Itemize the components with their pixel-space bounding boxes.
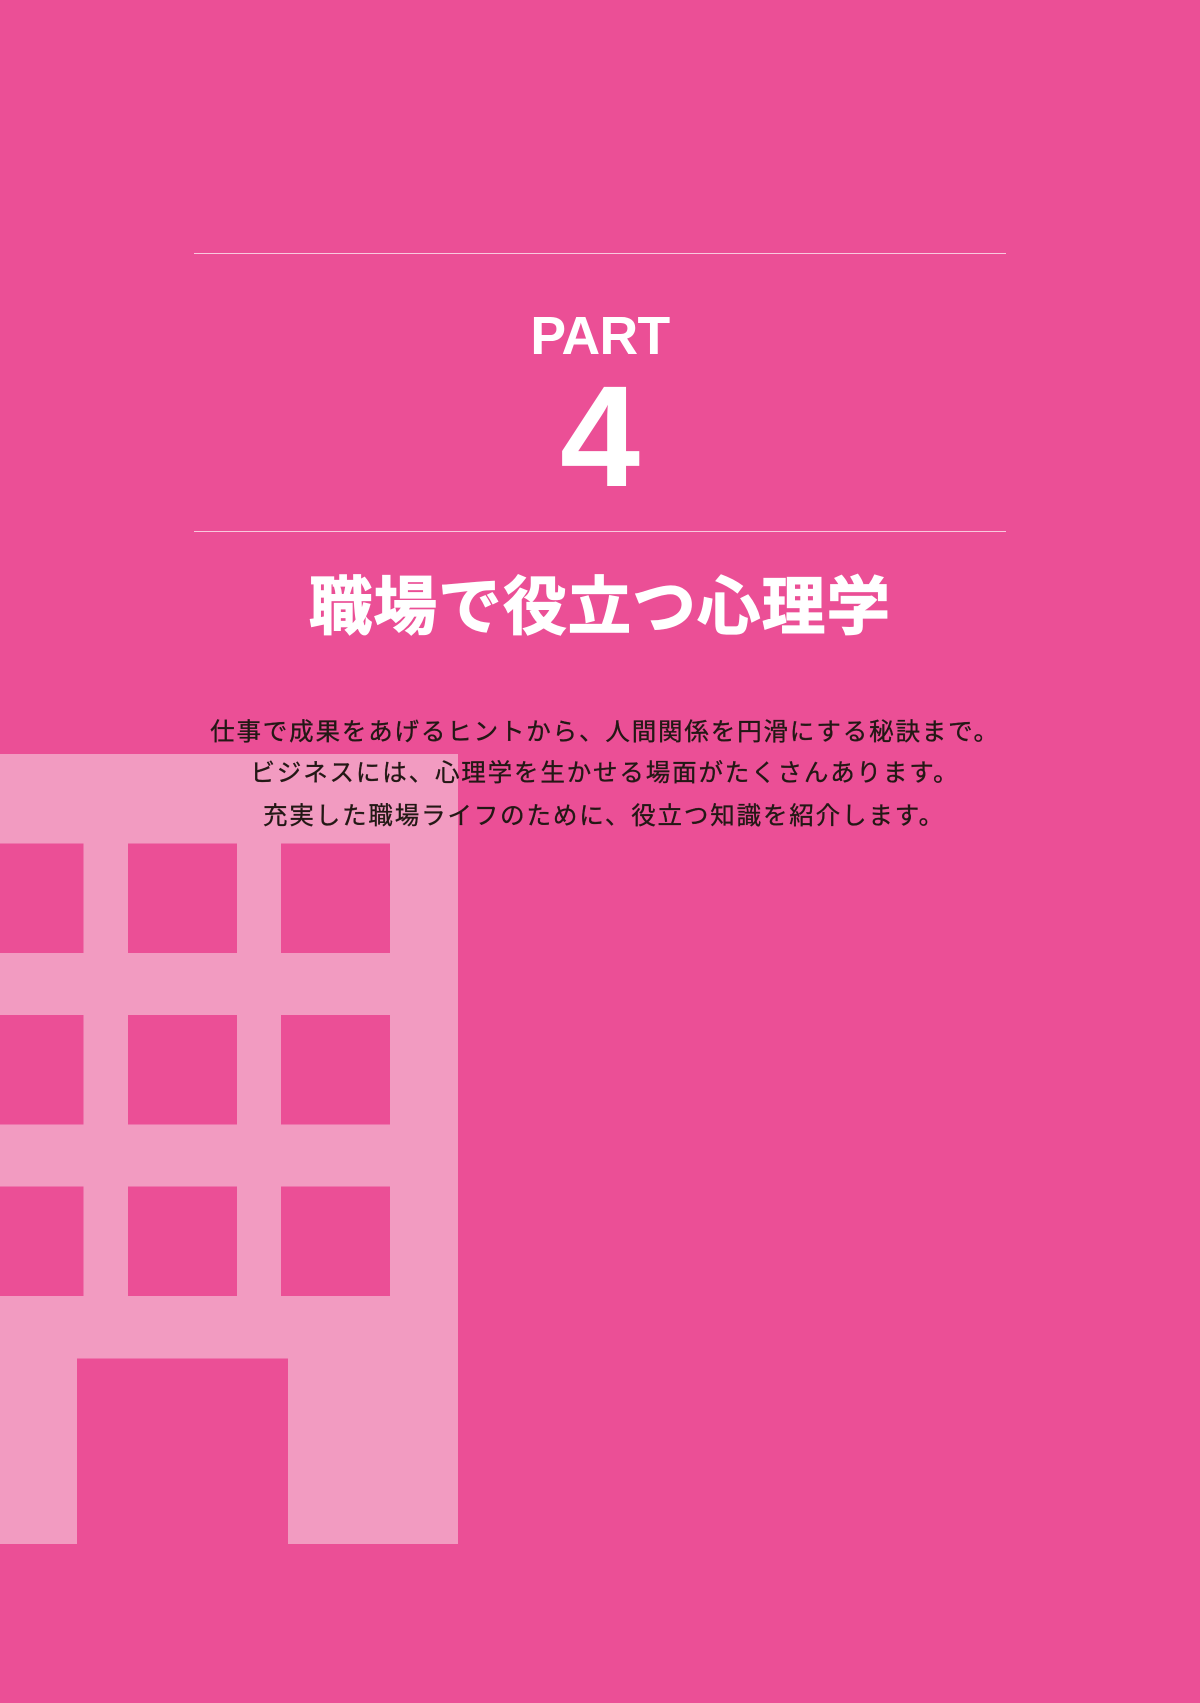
intro line 1: 仕事で成果をあげるヒントから、人間関係を円滑にする秘訣まで。: [210, 719, 1000, 746]
heading: PART label: PART: [530, 307, 670, 366]
windows: [0, 844, 390, 1296]
illustration: office building: [0, 754, 458, 1544]
intro line 3: 充実した職場ライフのために、役立つ知識を紹介します。: [263, 803, 945, 830]
intro line 2: ビジネスには、心理学を生かせる場面がたくさんあります。: [250, 760, 960, 787]
title: 職場で役立つ心理学: [309, 573, 891, 643]
text block: introduction: [210, 719, 1000, 830]
heading: part number 4: 4: [560, 356, 640, 517]
